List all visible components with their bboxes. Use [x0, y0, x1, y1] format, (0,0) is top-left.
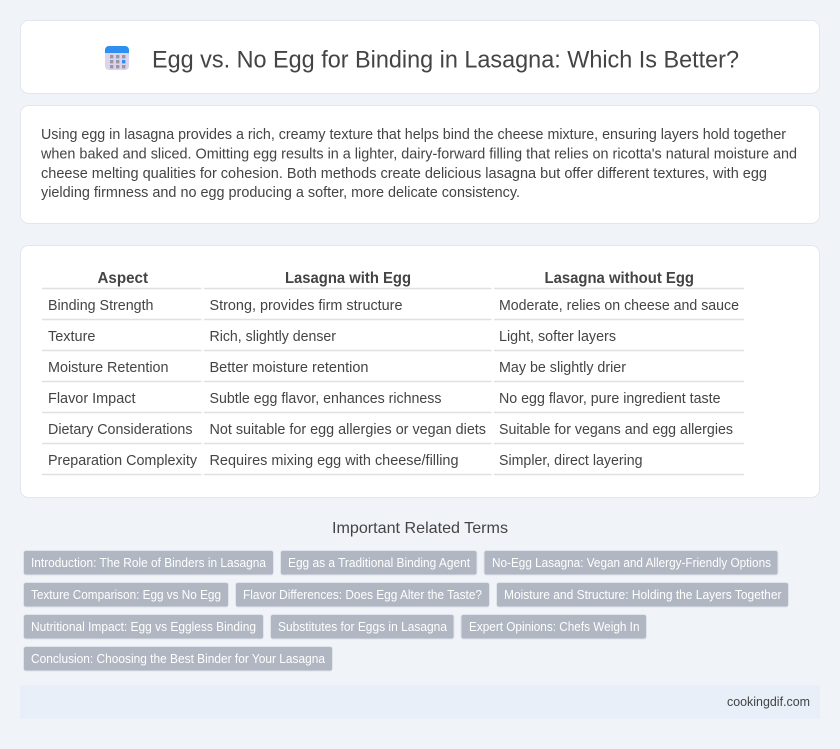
- row: moisture retention: Better moisture retention: [210, 360, 368, 376]
- panel: comparison table: [20, 246, 820, 498]
- row: preparation complexity: [48, 453, 642, 469]
- tag: Substitutes for Eggs in Lasagna: [278, 620, 447, 634]
- row: moisture retention: May be slightly drier: [499, 360, 626, 376]
- footer: [20, 685, 820, 719]
- row: preparation complexity: Requires mixing egg with cheese/filling: [210, 453, 458, 469]
- text block: introduction paragraph: yielding firmness and no egg producing a softer, more delicate consistency.: [41, 185, 520, 201]
- row: preparation complexity: Simpler, direct layering: [499, 453, 642, 469]
- table header: [98, 270, 694, 287]
- tag: Conclusion: Choosing the Best Binder for Your Lasagna: [31, 652, 325, 666]
- tag: Texture Comparison: Egg vs No Egg: [31, 588, 221, 602]
- tag: Nutritional Impact: Egg vs Eggless Binding: [31, 620, 256, 634]
- tag: No-Egg Lasagna: Vegan and Allergy-Friendly Options: [492, 556, 771, 570]
- table header: Lasagna without Egg: [544, 270, 694, 287]
- title: Egg vs. No Egg for Binding in Lasagna: Which Is Better?: [152, 46, 739, 74]
- row: texture: Light, softer layers: [499, 329, 616, 345]
- tag: Introduction: The Role of Binders in Lasagna: [31, 556, 266, 570]
- table header: Aspect: [98, 270, 149, 287]
- row: binding strength: Moderate, relies on cheese and sauce: [499, 298, 739, 314]
- panel: introduction: [20, 106, 820, 224]
- text block: introduction paragraph: [40, 127, 797, 201]
- tag: [24, 646, 332, 671]
- row: dietary considerations: Dietary Considerations: [48, 422, 192, 438]
- row: moisture retention: Moisture Retention: [48, 360, 168, 376]
- row: moisture retention: [48, 360, 626, 376]
- row: flavor impact: [48, 391, 720, 407]
- row: texture: Texture: [48, 329, 96, 345]
- text block: introduction paragraph: Using egg in lasagna provides a rich, creamy texture that helps bind the cheese mixture, ensuring layers hold together: [41, 127, 786, 143]
- tag: Expert Opinions: Chefs Weigh In: [469, 620, 640, 634]
- row: binding strength: Binding Strength: [48, 298, 154, 314]
- tag: [24, 550, 274, 575]
- row: dietary considerations: Suitable for vegans and egg allergies: [499, 422, 733, 438]
- tag: Egg as a Traditional Binding Agent: [288, 556, 470, 570]
- tag: [24, 614, 264, 639]
- table header: Lasagna with Egg: [285, 270, 411, 287]
- row: flavor impact: No egg flavor, pure ingredient taste: [499, 391, 720, 407]
- tag: [496, 582, 788, 607]
- row: flavor impact: Subtle egg flavor, enhances richness: [210, 391, 442, 407]
- row: preparation complexity: Preparation Complexity: [48, 453, 198, 469]
- tag: [270, 614, 454, 639]
- footer source text: cookingdif.com: [727, 694, 810, 709]
- panel: header: [20, 20, 820, 94]
- tag: [461, 614, 646, 639]
- tag list: related terms: [24, 550, 788, 671]
- tag: [484, 550, 778, 575]
- row: binding strength: Strong, provides firm structure: [210, 298, 402, 314]
- tag: [236, 582, 490, 607]
- row: dietary considerations: [48, 422, 733, 438]
- row: texture: [48, 329, 616, 345]
- row: dietary considerations: Not suitable for egg allergies or vegan diets: [210, 422, 486, 438]
- tag: Moisture and Structure: Holding the Layers Together: [504, 588, 782, 602]
- tag: Flavor Differences: Does Egg Alter the Taste?: [243, 588, 482, 602]
- heading: important related terms: Important Related Terms: [332, 520, 508, 537]
- text block: introduction paragraph: when baked and sliced. Omitting egg results in a lighter, dairy-forward filling that relies on ricotta's natural moisture and: [40, 146, 797, 162]
- row: flavor impact: Flavor Impact: [48, 391, 136, 407]
- tag: [24, 582, 228, 607]
- icon: calendar: [105, 46, 129, 70]
- text block: introduction paragraph: cheese melting qualities for cohesion. Both methods create delicious lasagna but offer different textures, with egg: [41, 166, 767, 182]
- row: binding strength: [48, 298, 739, 314]
- tag: [280, 550, 477, 575]
- row: texture: Rich, slightly denser: [210, 329, 336, 345]
